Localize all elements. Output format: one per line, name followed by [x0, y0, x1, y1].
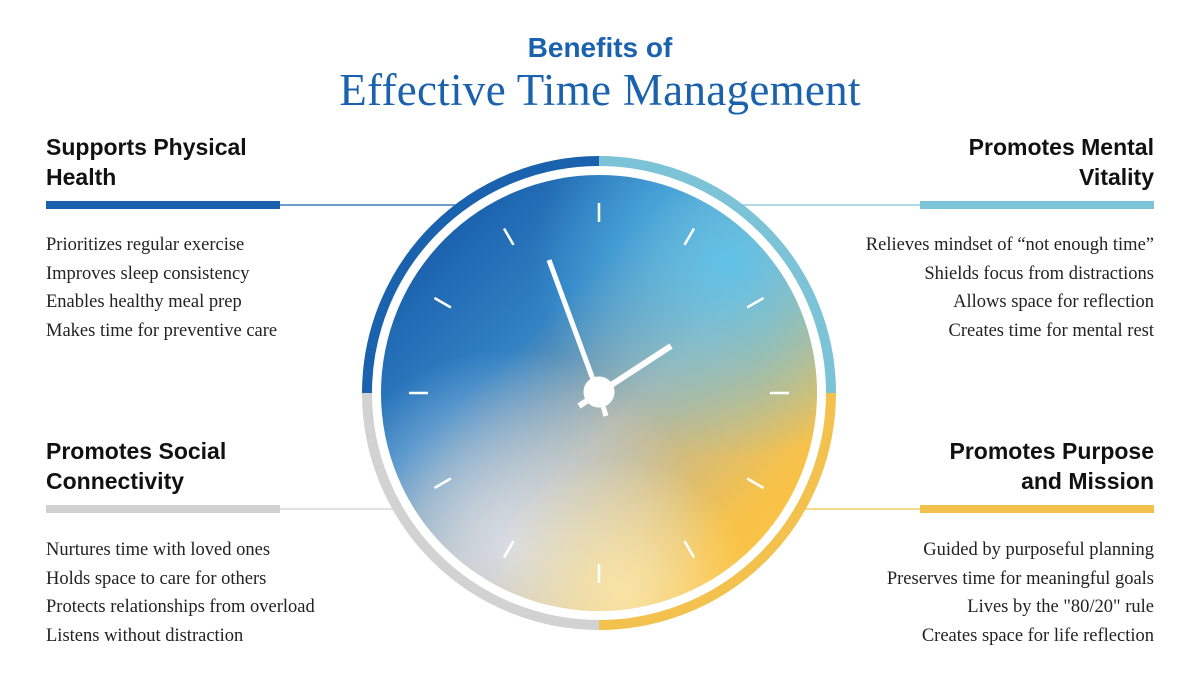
list: Listens without distraction	[46, 626, 243, 646]
connector lines	[280, 205, 920, 509]
list: Prioritizes regular exercise	[46, 235, 244, 255]
heading	[46, 134, 247, 190]
list: Enables healthy meal prep	[46, 292, 242, 312]
list: Improves sleep consistency	[46, 264, 249, 284]
heading: Connectivity	[46, 468, 184, 494]
bar	[46, 505, 280, 513]
list: Preserves time for meaningful goals	[887, 568, 1154, 588]
list: Guided by purposeful planning	[923, 540, 1154, 560]
bar	[46, 201, 280, 209]
clock ring	[367, 161, 831, 625]
title: Effective Time Management	[339, 65, 861, 115]
list	[866, 235, 1154, 340]
clock hands	[549, 260, 671, 416]
bar	[920, 201, 1154, 209]
panel: social connectivity	[46, 438, 315, 646]
list: Nurtures time with loved ones	[46, 540, 270, 560]
title: Benefits of	[528, 32, 672, 63]
heading: Vitality	[1079, 164, 1154, 190]
bar	[920, 505, 1154, 513]
clock face	[381, 175, 817, 611]
heading	[950, 438, 1154, 494]
heading: Health	[46, 164, 116, 190]
list: Creates space for life reflection	[922, 626, 1154, 646]
list: Allows space for reflection	[953, 292, 1154, 312]
heading: Supports Physical	[46, 134, 247, 160]
list	[46, 540, 315, 646]
heading: Promotes Mental	[969, 134, 1154, 160]
list: Shields focus from distractions	[924, 264, 1154, 284]
panel: purpose and mission	[887, 438, 1154, 646]
panel: mental vitality	[866, 134, 1154, 340]
list: Creates time for mental rest	[949, 320, 1154, 340]
clock ticks	[409, 203, 789, 583]
list: Makes time for preventive care	[46, 320, 277, 340]
list	[887, 540, 1154, 646]
list: Lives by the "80/20" rule	[967, 597, 1154, 617]
list: Protects relationships from overload	[46, 597, 315, 617]
heading: Promotes Social	[46, 438, 226, 464]
heading	[46, 438, 226, 494]
title	[339, 32, 861, 115]
heading: Promotes Purpose	[950, 438, 1154, 464]
heading: and Mission	[1021, 468, 1154, 494]
list: Holds space to care for others	[46, 568, 266, 588]
panel: physical health	[46, 134, 280, 340]
list	[46, 235, 277, 340]
heading	[969, 134, 1154, 190]
list: Relieves mindset of “not enough time”	[866, 235, 1154, 255]
